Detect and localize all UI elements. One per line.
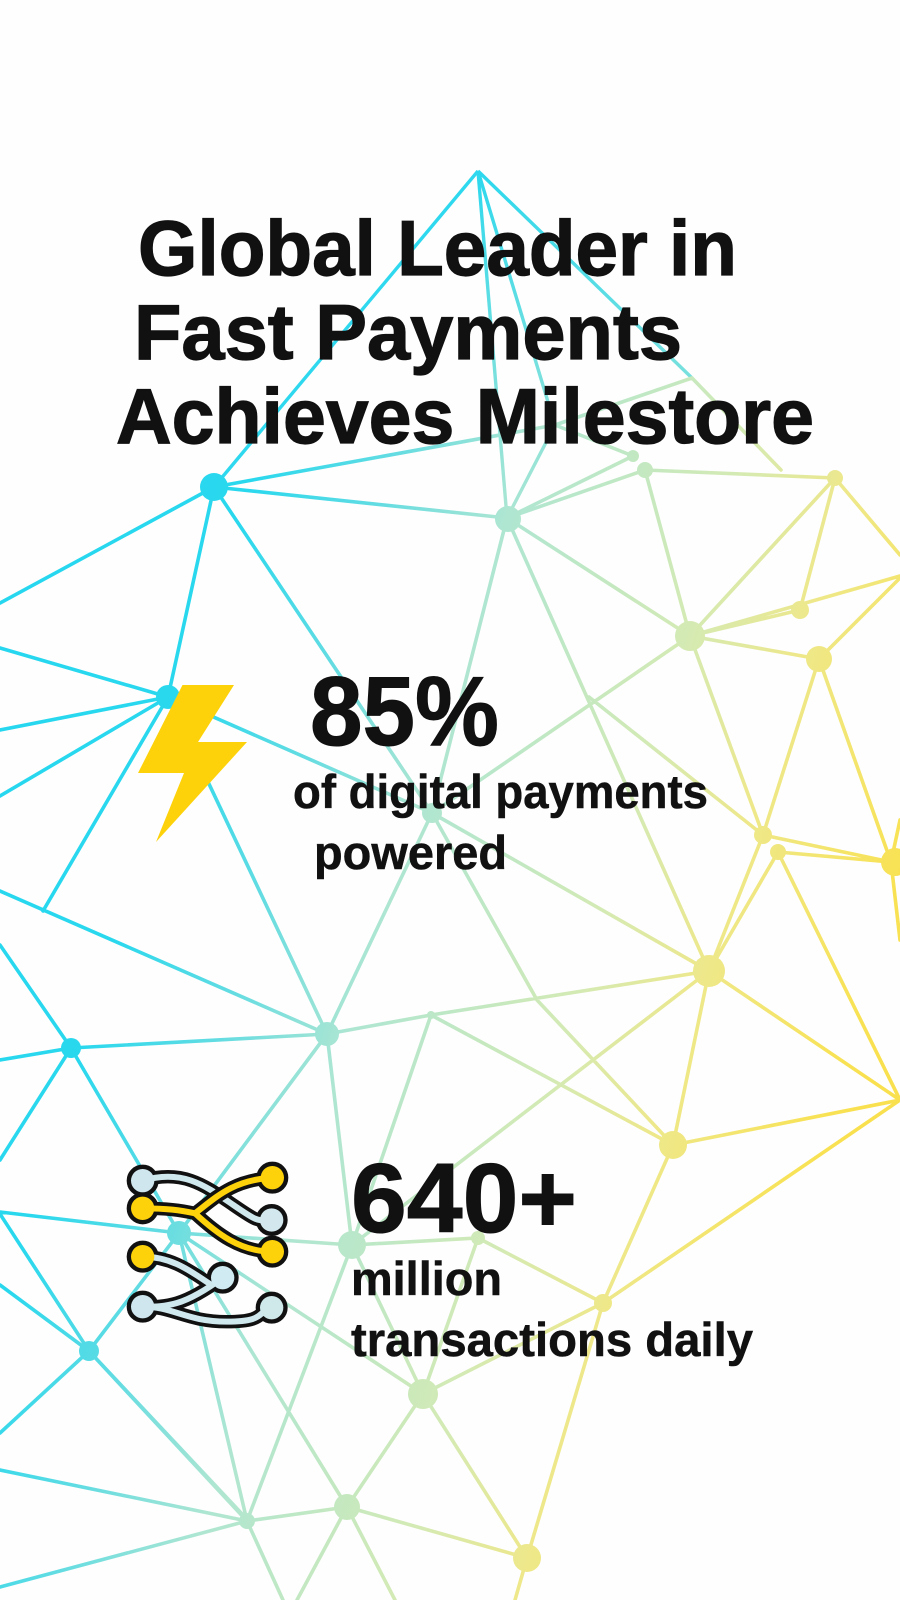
icon: crossing network routes [131,1166,284,1322]
network lines [0,378,900,1600]
icon: lightning bolt [138,685,247,842]
stat label: transactions daily: transactions daily [351,1313,753,1366]
title: Fast Payments [134,288,682,376]
stat label: digital payments: powered [314,826,507,879]
title: Global Leader in [138,204,737,292]
blue routes fill [131,1169,283,1322]
stat: 85%: 85% [310,656,499,766]
network lines from apex [478,171,692,518]
network nodes [61,450,900,1572]
stat label: transactions daily: million [351,1252,502,1305]
yellow routes outline [133,1168,282,1261]
stat label: transactions daily [351,1252,753,1366]
stat: 640+: 640+ [351,1143,577,1253]
blue routes outline [133,1171,281,1322]
stat label: digital payments [293,765,708,879]
stat label: digital payments: of digital payments [293,765,708,818]
network line from apex to left hub [214,171,478,487]
title: Achieves Milestore [116,372,814,460]
title [116,204,814,460]
yellow routes fill [131,1166,284,1268]
